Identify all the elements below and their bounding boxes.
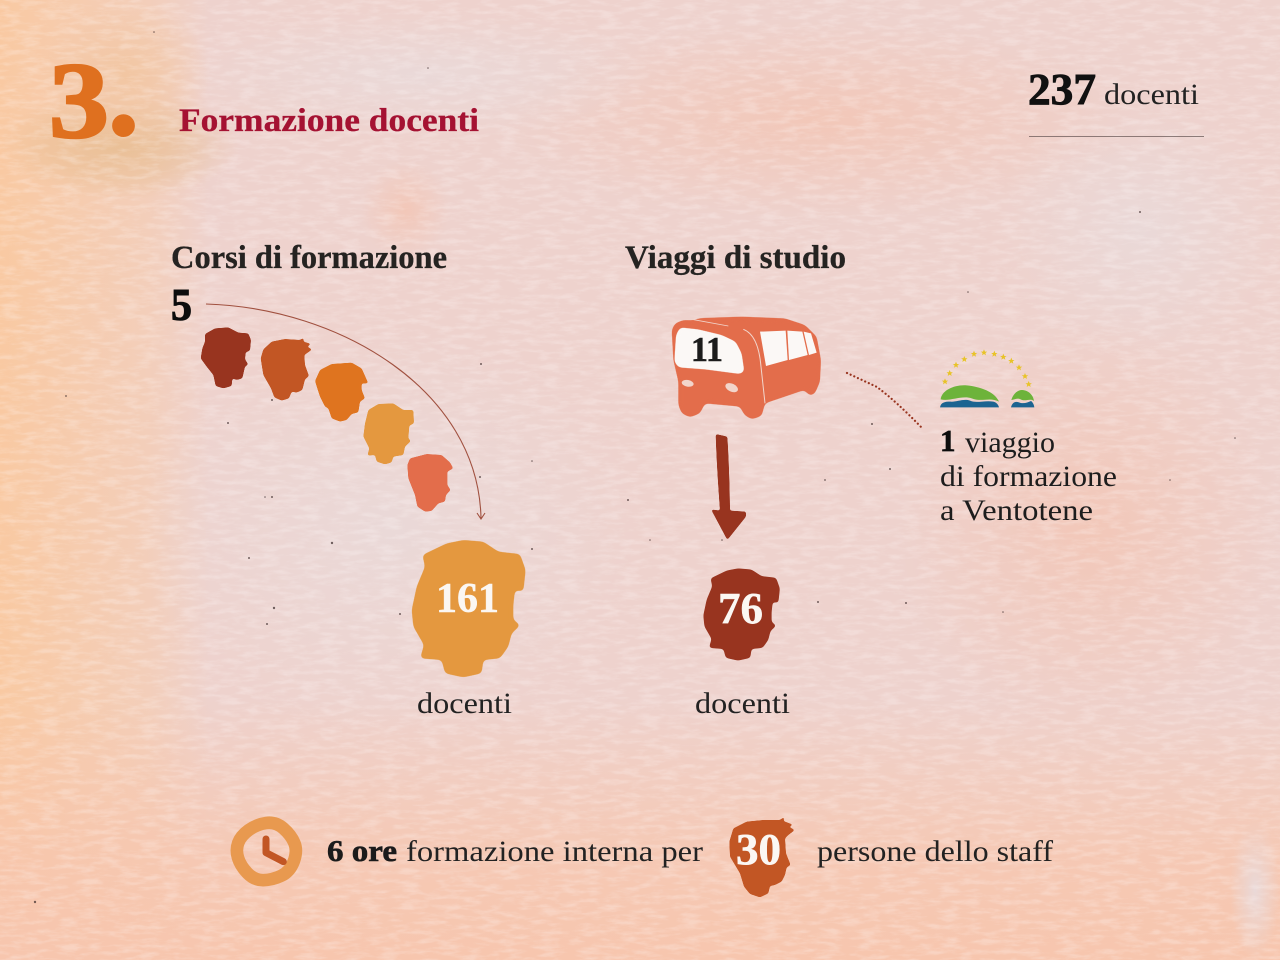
arrow: bus to teachers: [711, 434, 746, 540]
heading: viaggi: Viaggi di studio: [625, 240, 846, 276]
title: Formazione docenti: [179, 103, 479, 139]
panel: corsi di formazione: [171, 240, 526, 720]
icon: head with 30: 30: [736, 825, 781, 874]
curved arrow: [206, 304, 485, 519]
total teachers: [1028, 65, 1204, 136]
text: viaggio a Ventotene: 1: [940, 423, 956, 458]
icon: Ventotene logo: [940, 349, 1034, 407]
total teachers: 237: [1028, 65, 1096, 114]
label: docenti: docenti: [695, 687, 790, 720]
text: persone dello staff: persone dello staff: [817, 835, 1053, 868]
label: docenti: docenti: [417, 687, 512, 720]
icon: bus with 11: [672, 317, 821, 419]
icon: large head with 161: [412, 540, 526, 677]
section number: 3: [49, 42, 109, 161]
icon: head with 76: [703, 568, 780, 661]
icon: large head with 161: 161: [436, 576, 499, 622]
total teachers: docenti: [1104, 78, 1199, 111]
text: viaggio a Ventotene: viaggio: [965, 427, 1055, 459]
icon: head with 76: 76: [718, 584, 763, 633]
icon: head with 30: [729, 816, 795, 897]
text: viaggio a Ventotene: a Ventotene: [940, 495, 1093, 527]
icon: bus with 11: 11: [691, 330, 723, 369]
text: viaggio a Ventotene: di formazione: [940, 461, 1117, 493]
text: formazione interna per: formazione interna per: [406, 835, 703, 868]
icon: head 3: [315, 363, 368, 422]
panel: staff training: [237, 816, 1053, 897]
dotted connector: [847, 373, 922, 428]
panel: viaggi di studio: [625, 240, 1117, 720]
number of courses: 5: [171, 280, 192, 330]
section number: .: [106, 11, 141, 166]
section number: [49, 11, 141, 166]
icon: head 4: [363, 403, 414, 464]
text: viaggio a Ventotene: [940, 423, 1117, 527]
heading: corsi: Corsi di formazione: [171, 240, 447, 276]
icon: head 5: [407, 454, 453, 512]
text: 6 ore: 6 ore: [327, 833, 397, 868]
icon: head 1: [201, 327, 251, 388]
icon: head 2: [261, 337, 312, 401]
icon: clock: [237, 823, 296, 880]
